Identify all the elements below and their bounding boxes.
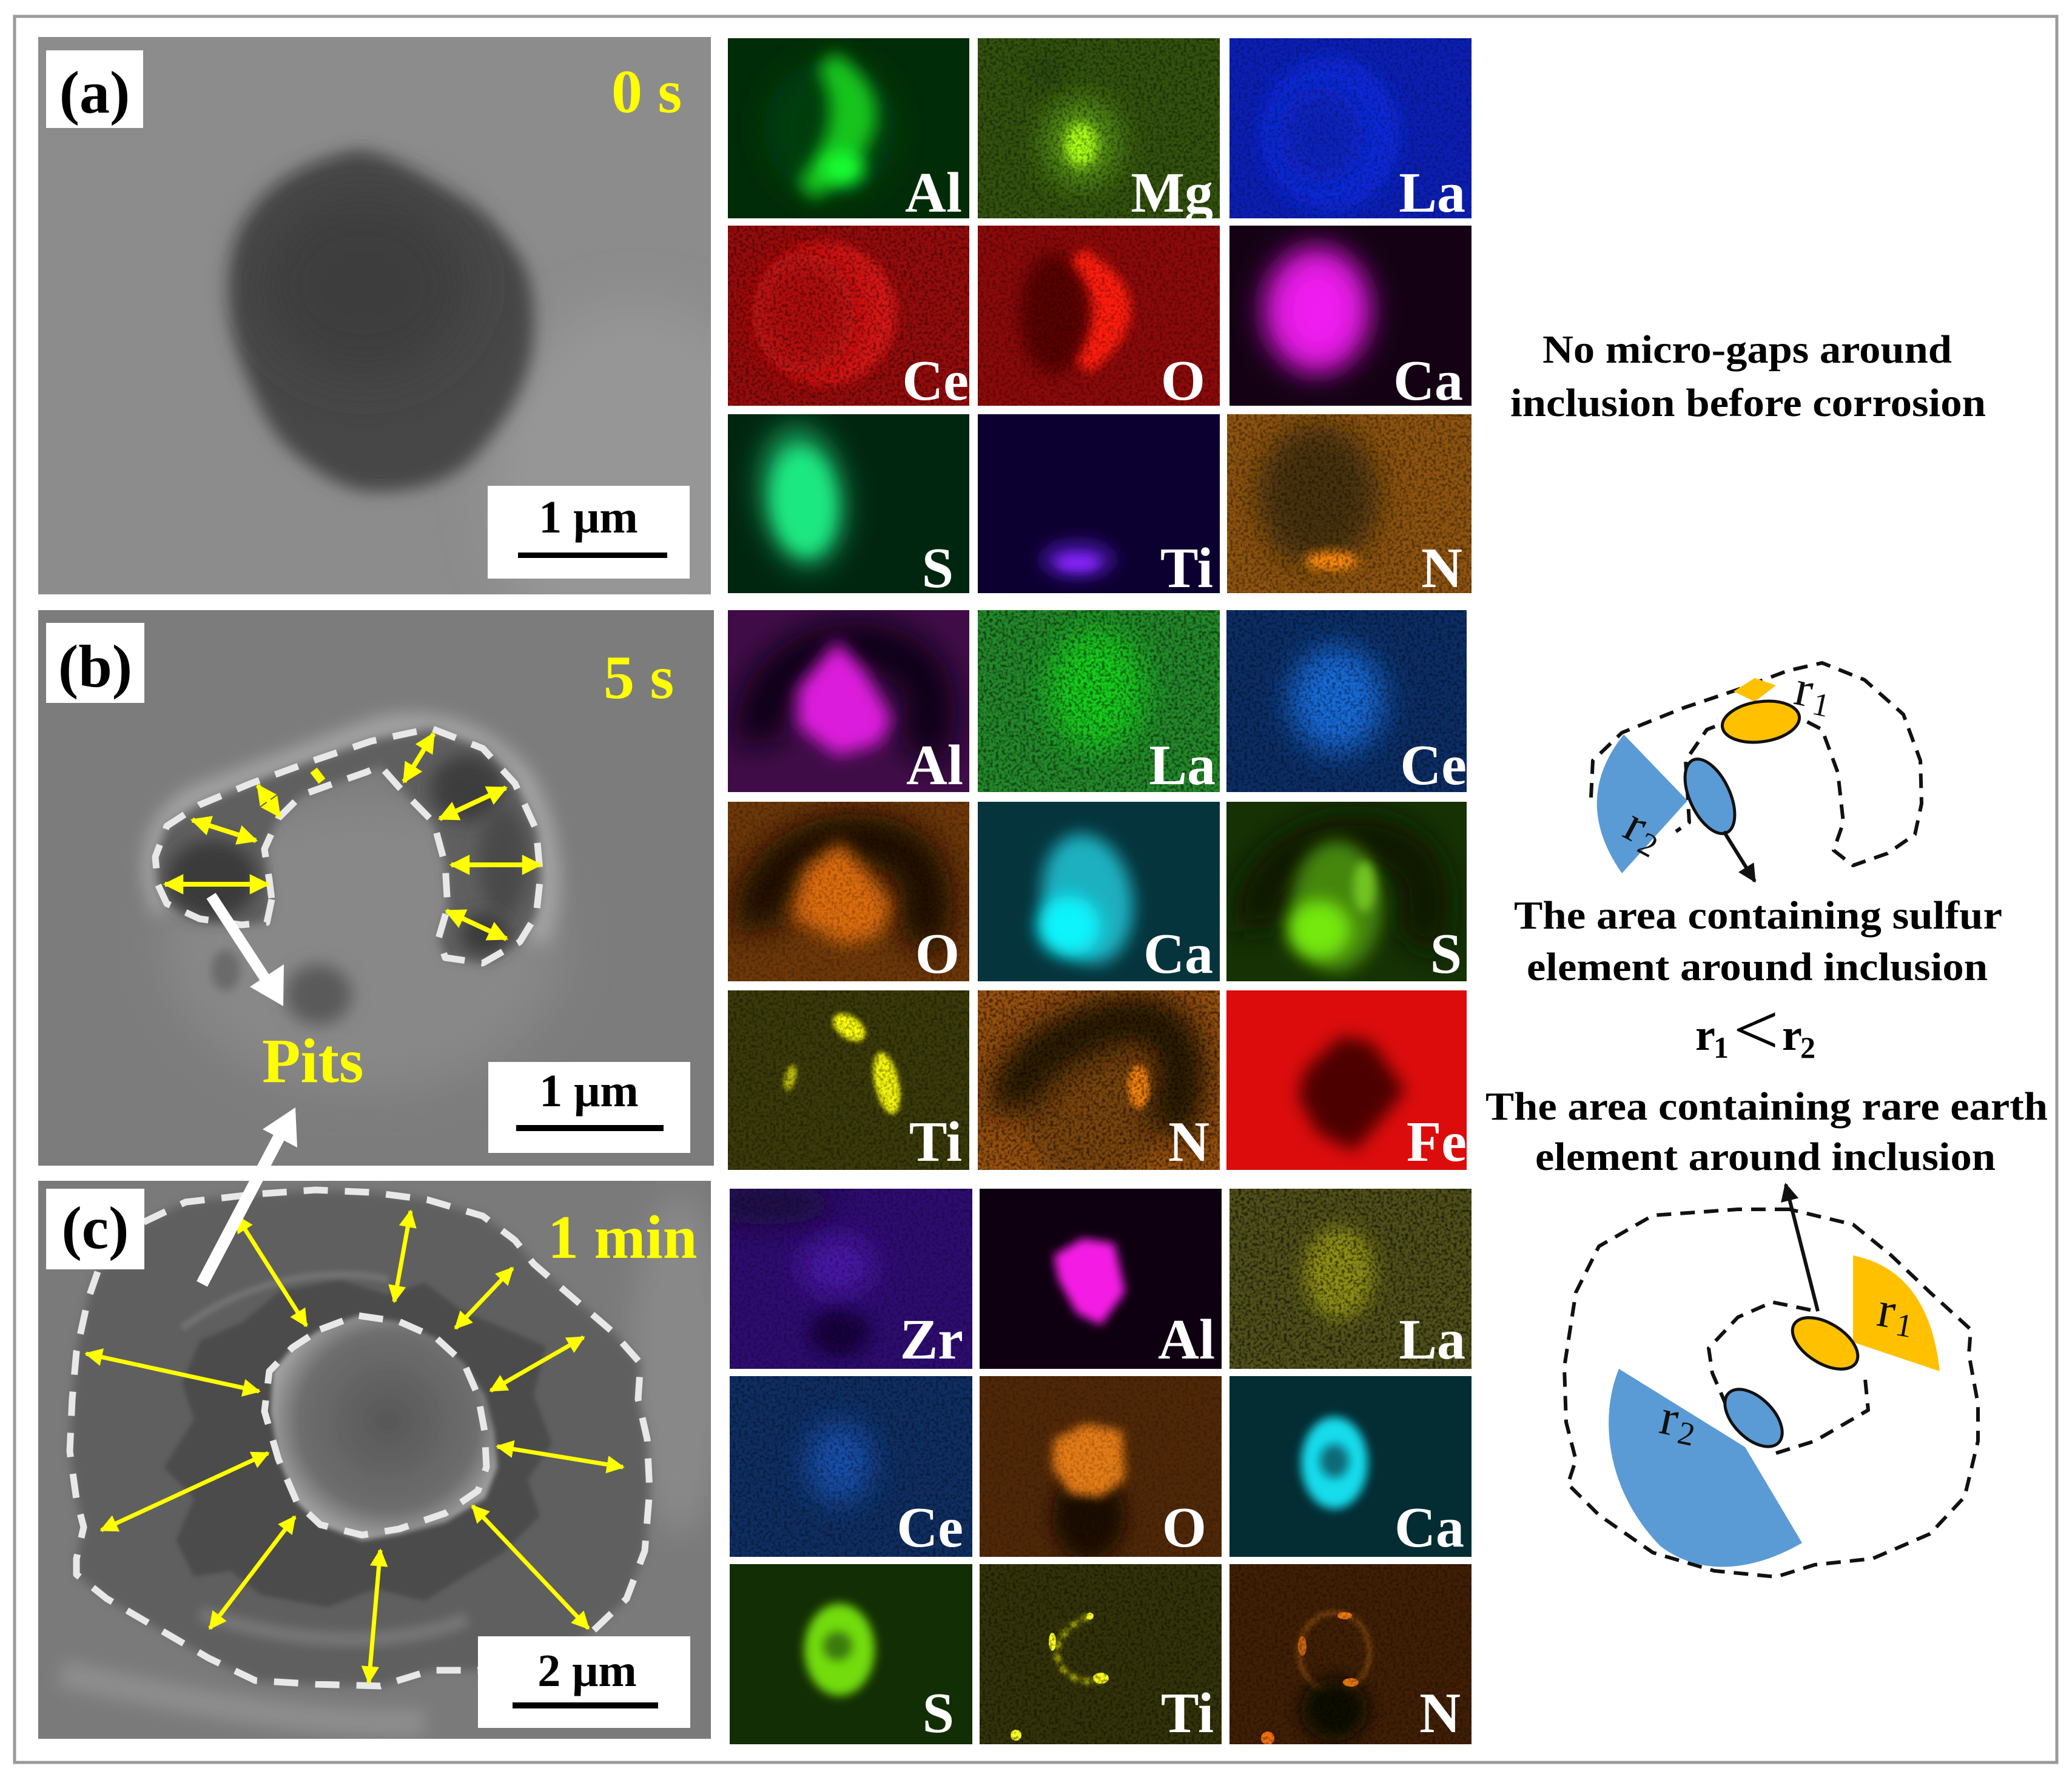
map c: Ti [980, 1564, 1222, 1745]
dashed inner outline [1709, 1302, 1868, 1453]
caption: rare earth area: element around inclusion [1535, 1135, 1996, 1179]
yellow gap-width arrows [165, 734, 540, 939]
map a: Mg [978, 38, 1220, 224]
schematic: rare earth area (bottom) [1564, 1184, 1978, 1577]
map c: N: N [1419, 1682, 1461, 1745]
caption: sulfur area: The area containing sulfur [1514, 893, 2002, 938]
relation r1 less than r2: < [1733, 989, 1779, 1070]
schematic: sulfur area (top) [1591, 660, 1922, 881]
caption: no micro-gaps: inclusion before corrosion [1510, 381, 1986, 425]
map a: Ce [728, 226, 969, 412]
scale bar 1 µm: 1 μm [539, 1066, 639, 1117]
blue sector r2 [1597, 734, 1687, 873]
inclusion body [271, 1315, 497, 1540]
label (a) [46, 50, 143, 128]
map b: Al: Al [906, 734, 963, 797]
map c: Ce [730, 1376, 972, 1559]
map c: Ca [1229, 1376, 1472, 1559]
label (a): (a) [59, 59, 130, 126]
map b: S [1226, 802, 1467, 986]
map c: S [730, 1564, 972, 1745]
yellow gap-width arrows [86, 1211, 623, 1682]
arrow [1724, 831, 1755, 881]
map b: N [978, 990, 1220, 1184]
map b: Fe: Fe [1407, 1110, 1467, 1174]
map b: O: O [915, 922, 960, 986]
map c: N [1229, 1564, 1472, 1745]
white arrow to pits [211, 896, 284, 1006]
map c: O [980, 1376, 1222, 1560]
map b: Ti [728, 990, 969, 1174]
orange sector r1 [1853, 1255, 1940, 1371]
caption: sulfur area: element around inclusion [1527, 945, 1988, 989]
r2 label [1655, 1389, 1703, 1453]
orange ellipse [1784, 1307, 1866, 1380]
arrow [1786, 1184, 1818, 1311]
map a: Al: Al [905, 161, 962, 224]
map c: Al [980, 1189, 1222, 1371]
map a: S [728, 414, 969, 600]
time label 5 s: 5 s [604, 643, 674, 712]
map c: Zr: Zr [900, 1308, 963, 1371]
scale bar 2 µm [478, 1636, 690, 1728]
r2 label: r [1655, 1389, 1684, 1447]
map c: S: S [923, 1682, 954, 1745]
time label 0 s: 0 s [611, 58, 682, 126]
orange diamond [1734, 678, 1776, 702]
scale bar 1 µm [488, 1062, 690, 1153]
map c: La: La [1399, 1308, 1465, 1371]
label (c): (c) [62, 1194, 129, 1261]
map a: Ce: Ce [902, 349, 969, 412]
relation r1 less than r2: r [1695, 1010, 1715, 1060]
map c: Zr [699, 1183, 972, 1371]
map c: Ca: Ca [1394, 1496, 1464, 1559]
map a: Ti: Ti [1160, 537, 1213, 600]
map c: O: O [1162, 1496, 1206, 1559]
map b: La [978, 610, 1220, 797]
map c: Al: Al [1158, 1308, 1215, 1371]
relation r1 less than r2: 1 [1714, 1030, 1729, 1064]
label (b): (b) [58, 633, 132, 700]
map b: Ti: Ti [909, 1110, 962, 1174]
map c: La [1229, 1189, 1472, 1371]
map b: O [728, 802, 969, 986]
dashed inclusion outline [1591, 663, 1922, 865]
map a: Mg: Mg [1131, 161, 1213, 224]
caption: sulfur area [1514, 893, 2002, 989]
map a: Al [728, 38, 969, 224]
EDS map grid for (b) [728, 610, 1467, 1184]
relation r1 less than r2 [1695, 989, 1815, 1070]
dashed outer outline [1564, 1209, 1978, 1577]
map c: Ce: Ce [896, 1496, 963, 1559]
corroded gap region [155, 728, 540, 963]
caption: no micro-gaps [1510, 328, 1986, 425]
orange ellipse [1720, 696, 1802, 747]
dashed gap outline [155, 728, 540, 963]
map b: N: N [1168, 1110, 1209, 1174]
text: Pits: Pits [262, 1026, 364, 1096]
caption: rare earth area [1485, 1084, 2048, 1179]
map a: La: La [1399, 161, 1465, 224]
r2 label: 2 [1675, 1414, 1698, 1453]
scale bar 1 µm: 1 μm [539, 492, 638, 543]
EDS map grid for (a) [728, 38, 1472, 600]
map a: Ca [1229, 226, 1472, 412]
r2 label: 2 [1632, 825, 1664, 865]
map b: Fe [1226, 990, 1467, 1174]
blue ellipse [1715, 1379, 1792, 1457]
map a: N [1227, 414, 1472, 600]
map a: La [1229, 38, 1472, 224]
map b: Ca [978, 802, 1220, 986]
r2 label: r [1615, 796, 1657, 854]
map b: Ca: Ca [1143, 922, 1213, 986]
panel (b): SEM image at 5 s [38, 610, 714, 1166]
corroded region [70, 1190, 650, 1686]
relation r1 less than r2: r [1782, 1010, 1802, 1060]
label (b) [46, 623, 144, 703]
map b: La: La [1149, 734, 1216, 797]
r1 label: r [1790, 660, 1818, 718]
r2 label [1615, 796, 1674, 865]
panel (a): SEM image at 0 s [38, 37, 711, 594]
map b: S: S [1430, 922, 1462, 986]
r1 label: 1 [1893, 1306, 1916, 1345]
scale bar 2 µm: 2 μm [537, 1645, 637, 1696]
caption: no micro-gaps: No micro-gaps around [1542, 328, 1952, 372]
r1 label [1873, 1281, 1919, 1345]
white arrow from panel (c) up to Pits [202, 1107, 297, 1284]
dashed outlines [70, 1190, 650, 1686]
relation r1 less than r2: 2 [1800, 1030, 1815, 1064]
map a: Ca: Ca [1393, 349, 1463, 412]
caption: rare earth area: The area containing rare earth [1485, 1084, 2048, 1129]
map a: O: O [1161, 349, 1205, 412]
EDS map grid for (c) [699, 1183, 1472, 1745]
map b: Al [728, 610, 969, 797]
map a: O [978, 226, 1220, 412]
time label 1 min: 1 min [548, 1203, 698, 1272]
blue ellipse [1675, 751, 1745, 841]
r1 label [1789, 660, 1837, 724]
map b: Ce [1226, 610, 1467, 797]
map c: Ti: Ti [1161, 1682, 1214, 1745]
map a: Ti [978, 414, 1220, 600]
panel (c): SEM image at 1 min [38, 1181, 711, 1739]
map b: Ce: Ce [1400, 734, 1467, 797]
r1 label: 1 [1809, 685, 1833, 724]
r1 label: r [1874, 1281, 1900, 1340]
scale bar 1 µm [488, 486, 690, 579]
label (c) [46, 1189, 144, 1269]
blue sector r2 [1609, 1369, 1802, 1567]
map a: S: S [922, 537, 954, 600]
map a: N: N [1421, 537, 1462, 600]
